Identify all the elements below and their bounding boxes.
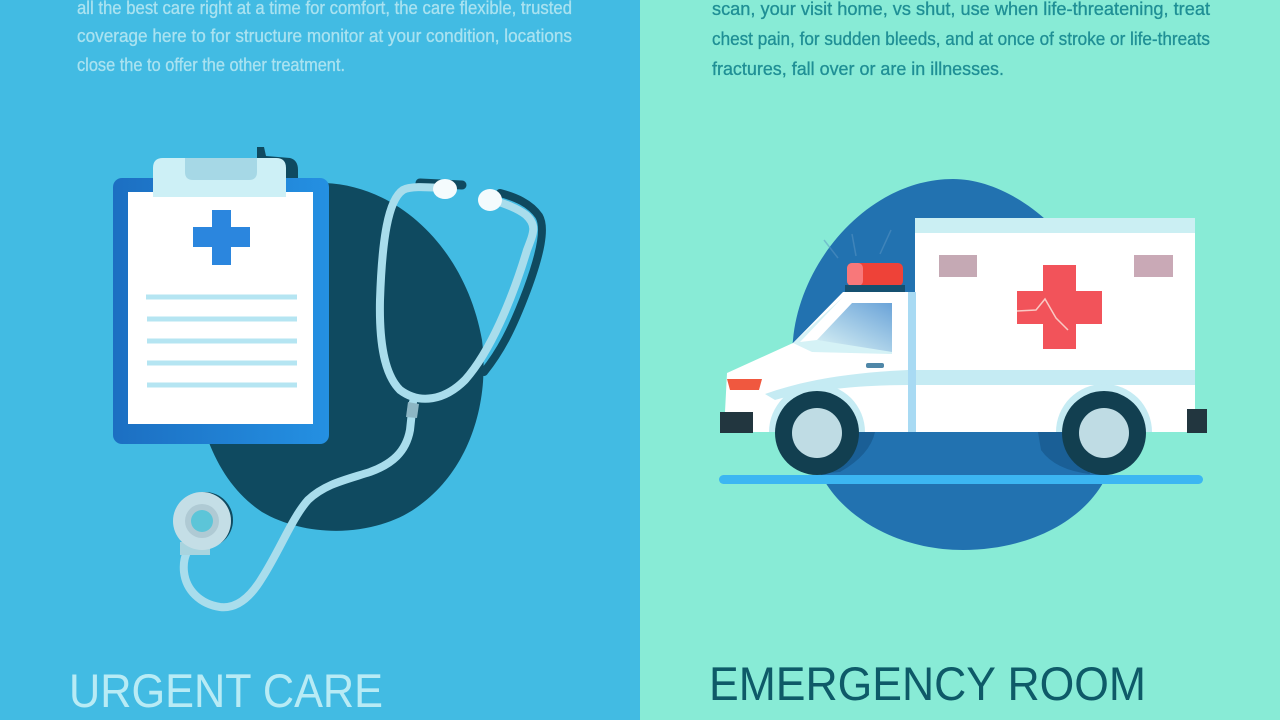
door handle xyxy=(866,363,884,368)
text block: urgent care description: coverage here to for structure monitor at your condition, locations xyxy=(77,26,572,46)
panel: emergency room xyxy=(640,0,1280,720)
text block: urgent care description xyxy=(77,0,572,75)
text block: emergency room description: chest pain, for sudden bleeds, and at once of stroke or life-threats xyxy=(712,29,1210,49)
box windows xyxy=(939,255,977,277)
icon: chestpiece xyxy=(173,492,233,555)
icon: blue medical cross xyxy=(193,210,250,265)
wheel shadows xyxy=(815,432,875,474)
heading: urgent care: URGENT CARE xyxy=(69,664,383,717)
icon: dark blob behind stethoscope xyxy=(208,183,484,531)
ambulance cab xyxy=(725,292,908,432)
bumpers xyxy=(720,412,753,433)
icon: clipboard xyxy=(113,147,329,444)
panel: urgent care xyxy=(0,0,640,720)
text block: urgent care description: close the to offer the other treatment. xyxy=(77,55,345,75)
ambulance box xyxy=(915,218,1195,432)
siren light beams xyxy=(824,230,891,258)
emergency light xyxy=(847,263,903,286)
text block: emergency room description xyxy=(712,0,1210,79)
road xyxy=(719,475,1203,484)
cab window xyxy=(817,303,892,352)
heading: emergency room: EMERGENCY ROOM xyxy=(709,657,1146,710)
front wheel xyxy=(769,384,865,475)
icon: blue circle behind ambulance xyxy=(791,179,1122,550)
icon: ambulance xyxy=(719,218,1207,484)
form lines xyxy=(146,294,297,388)
red cross xyxy=(1017,265,1102,349)
headlight xyxy=(727,379,762,390)
rear wheel xyxy=(1056,384,1152,475)
text block: emergency room description: fractures, fall over or are in illnesses. xyxy=(712,59,1004,79)
icon: stethoscope xyxy=(173,179,542,607)
